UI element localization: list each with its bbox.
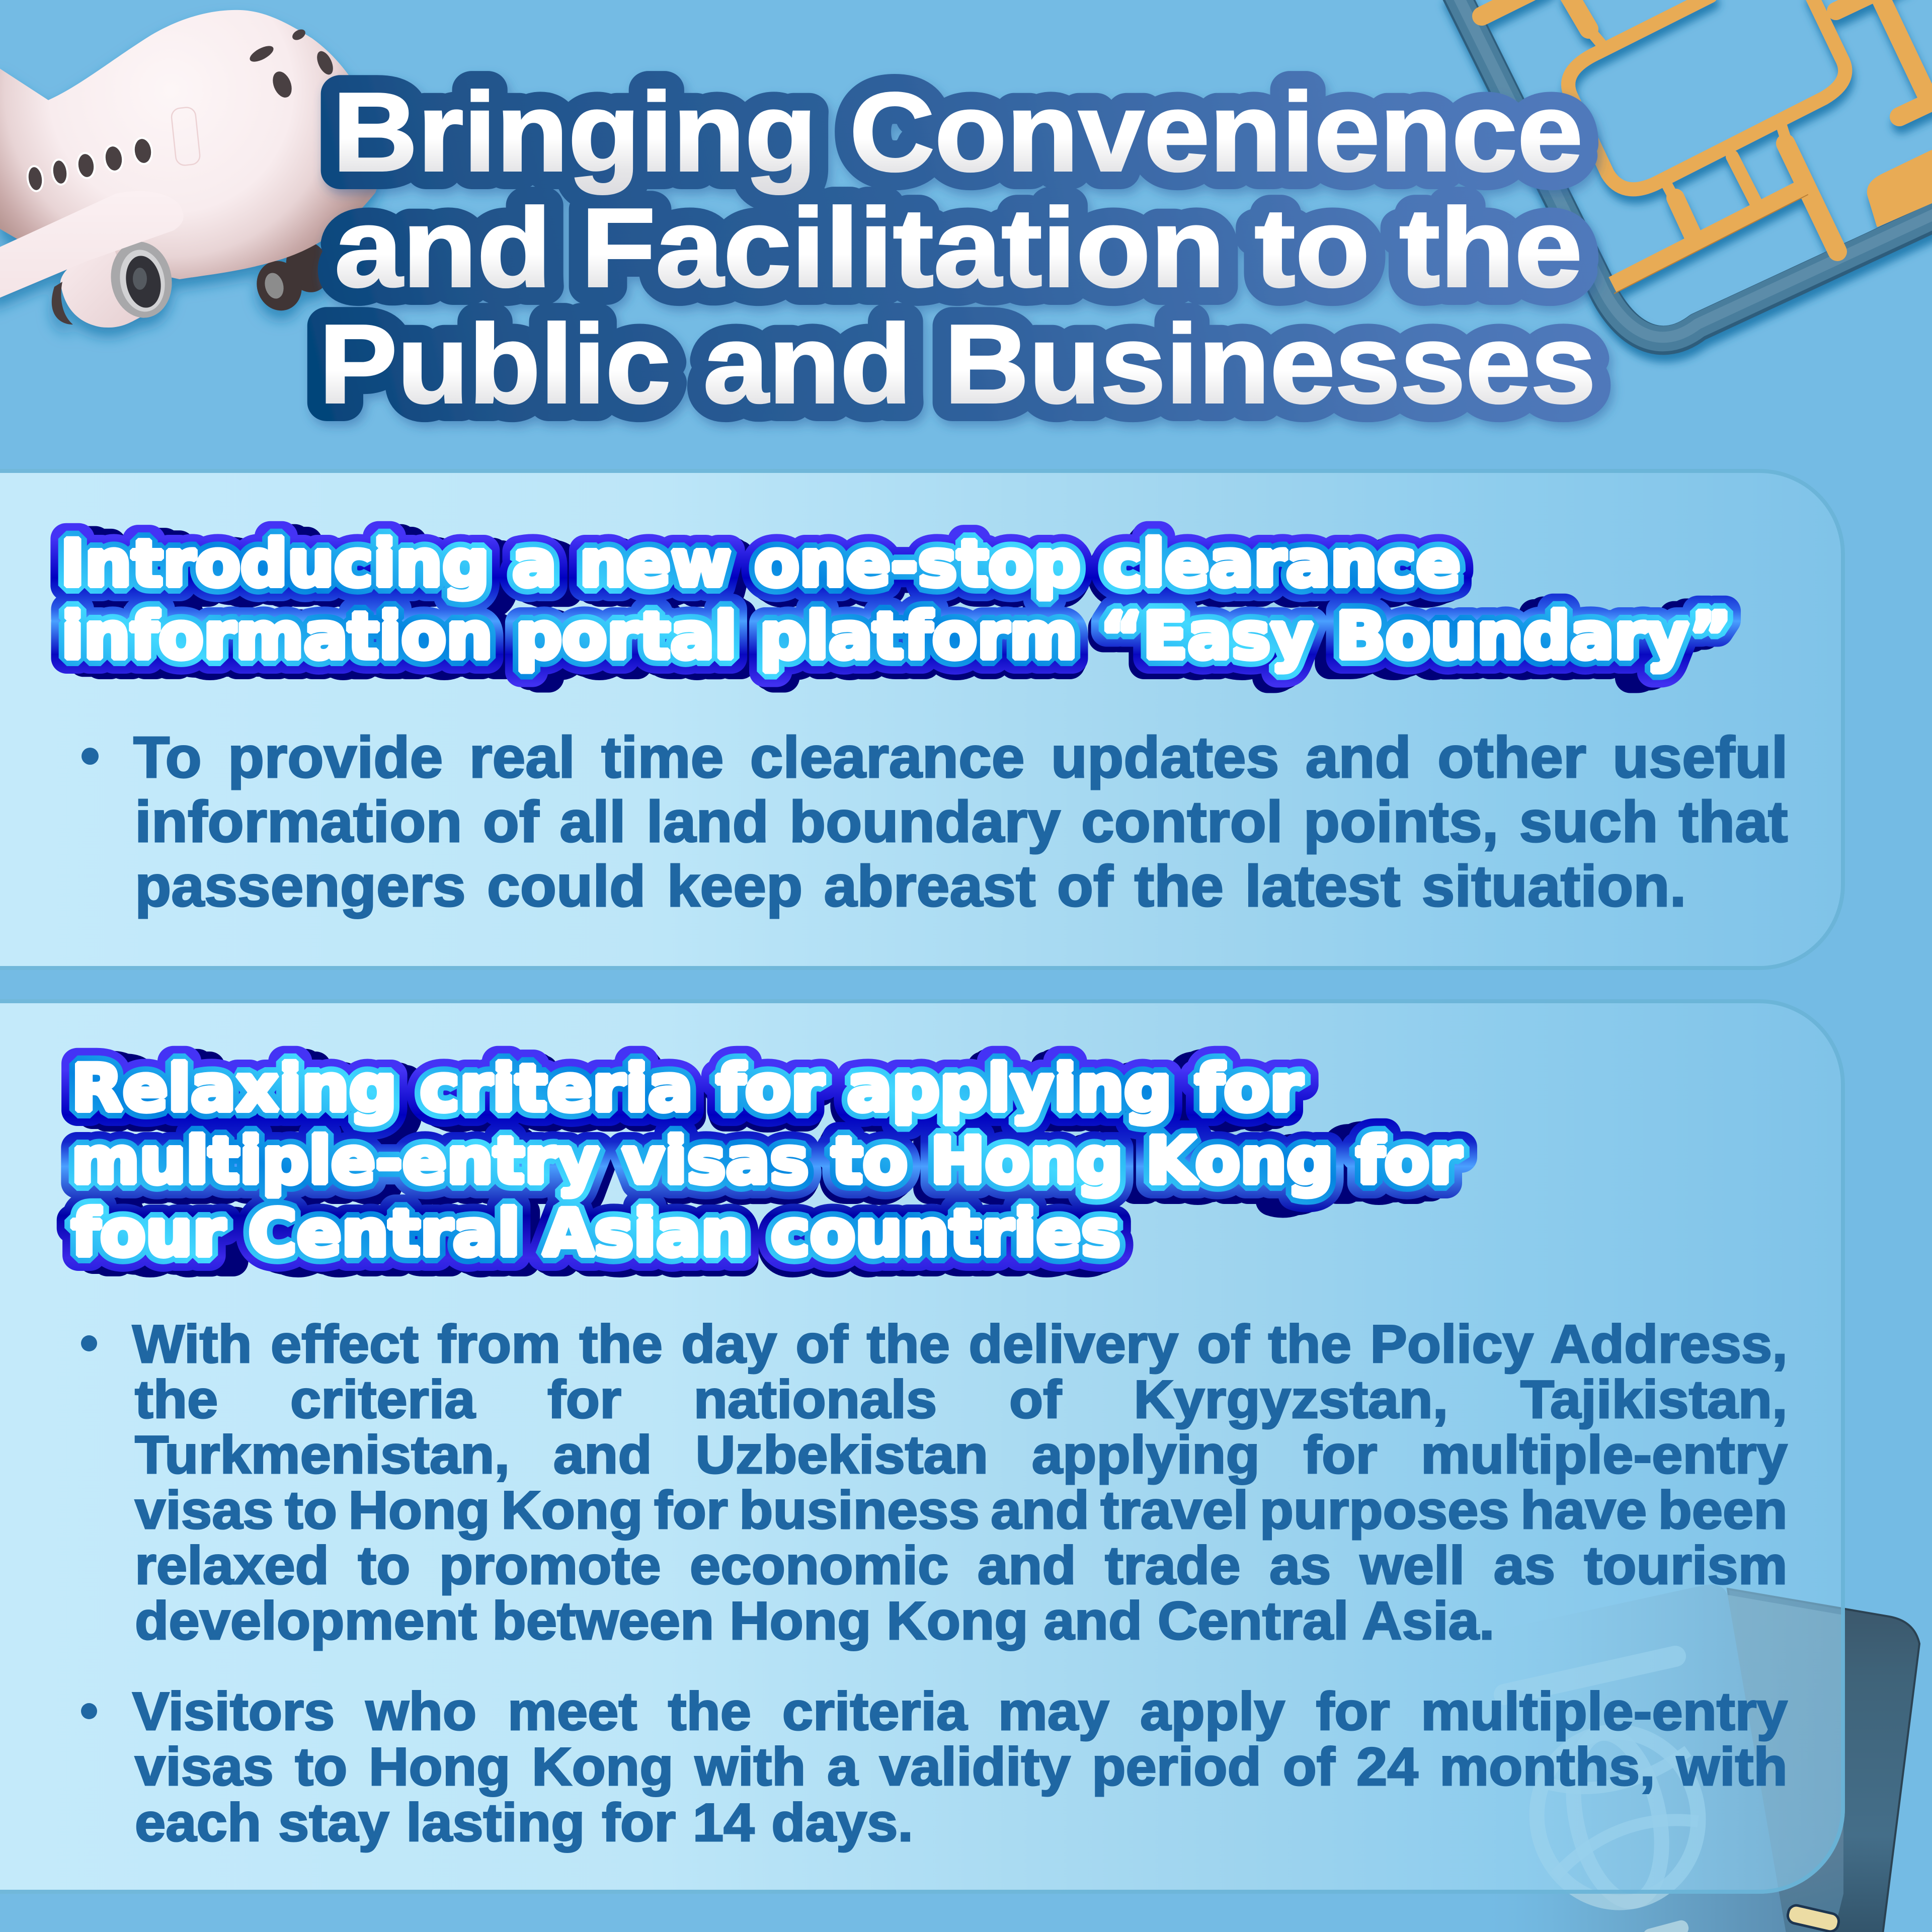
heading: multiple-entry visas: multiple-entry visas to Hong Kong for <box>87 1126 1446 1201</box>
heading: Easy Boundary: information portal platform “Easy Boundary” <box>78 601 1719 676</box>
text block: effect from Policy Address: relaxed to promote economic and trade as well as tourism <box>135 1535 1788 1595</box>
heading: Easy Boundary: Introducing a new one-stop clearance <box>60 526 1461 601</box>
title: Bringing Convenience <box>333 70 1583 195</box>
heading: multiple-entry visas: Relaxing criteria for applying for <box>71 1051 1303 1126</box>
landing gear <box>250 235 337 317</box>
heading: multiple-entry visas: Relaxing criteria for applying for <box>71 1051 1303 1126</box>
text block: effect from Policy Address: visas to Hong Kong for business and travel purposes have been <box>135 1480 1788 1540</box>
cockpit windows <box>248 27 336 100</box>
heading: Easy Boundary: Introducing a new one-stop clearance <box>94 531 1444 607</box>
heading: multiple-entry visas: four Central Asian countries <box>87 1198 1112 1273</box>
panel: relaxing visa criteria for Central Asian countries <box>0 999 1845 1894</box>
text block: visa validity period: visas to Hong Kong with a validity period of 24 months, with <box>135 1736 1788 1797</box>
title: Public and Businesses <box>319 302 1596 427</box>
heading: Easy Boundary <box>50 521 1741 693</box>
heading: Easy Boundary: Introducing a new one-stop clearance <box>77 529 1453 604</box>
text block: effect from Policy Address: Turkmenistan, and Uzbekistan applying for multiple-entry <box>135 1424 1788 1485</box>
heading: multiple-entry visas: four Central Asian countries <box>71 1196 1120 1271</box>
text block: real time clearance updates: To provide real time clearance updates and other useful <box>133 725 1788 790</box>
heading: multiple-entry visas: Relaxing criteria for applying for <box>87 1054 1291 1129</box>
heading: multiple-entry visas: multiple-entry visas to Hong Kong for <box>101 1129 1431 1204</box>
heading: multiple-entry visas: Relaxing criteria for applying for <box>71 1051 1303 1126</box>
wing <box>0 191 184 302</box>
heading: multiple-entry visas: multiple-entry visas to Hong Kong for <box>71 1123 1462 1198</box>
text block: effect from Policy Address <box>131 1314 1788 1651</box>
heading: multiple-entry visas: multiple-entry visas to Hong Kong for <box>71 1123 1462 1198</box>
icon: passport behind panel <box>1494 1585 1920 1932</box>
heading: Easy Boundary: information portal platform “Easy Boundary” <box>95 604 1707 679</box>
windows <box>26 137 153 192</box>
bullet marker <box>82 748 99 765</box>
heading: Easy Boundary: information portal platform “Easy Boundary” <box>61 599 1732 674</box>
text block: effect from Policy Address: development between Hong Kong and Central Asia. <box>135 1590 1495 1651</box>
heading: Easy Boundary: Introducing a new one-stop clearance <box>60 526 1461 601</box>
engine <box>52 237 178 328</box>
heading: multiple-entry visas <box>56 1045 1477 1277</box>
passport emblem <box>1504 1656 1714 1918</box>
title: Public and Businesses <box>319 302 1596 427</box>
bullet marker <box>81 1703 97 1719</box>
title: and Facilitation to the <box>335 186 1582 310</box>
heading: multiple-entry visas: multiple-entry visas to Hong Kong for <box>71 1123 1462 1198</box>
fuselage <box>0 10 382 279</box>
title: Bringing Convenience <box>333 70 1583 195</box>
bullet marker <box>81 1335 97 1351</box>
icon: plastic model sprue frame <box>1439 0 1932 368</box>
text block: visa validity period: Visitors who meet the criteria may apply for multiple-entry <box>132 1681 1788 1741</box>
title: and Facilitation to the <box>335 186 1582 310</box>
heading: multiple-entry visas: four Central Asian countries <box>71 1196 1120 1271</box>
text block: real time clearance updates <box>133 725 1788 919</box>
heading: Easy Boundary: Introducing a new one-stop clearance <box>60 526 1461 601</box>
icon: white cartoon airplane <box>0 10 386 345</box>
door <box>171 107 201 166</box>
text block: visa validity period: each stay lasting for 14 days. <box>135 1792 913 1853</box>
text block: effect from Policy Address: With effect from the day of the delivery of the Policy Address, <box>132 1314 1788 1374</box>
passport clasp <box>1642 1904 1840 1932</box>
heading: multiple-entry visas: four Central Asian countries <box>71 1196 1120 1271</box>
title <box>305 70 1618 432</box>
heading: multiple-entry visas: four Central Asian countries <box>101 1201 1105 1276</box>
panel: one-stop clearance information portal <box>0 469 1845 970</box>
text block: effect from Policy Address: the criteria for nationals of Kyrgyzstan, Tajikistan, <box>135 1369 1788 1429</box>
heading: Easy Boundary: information portal platform “Easy Boundary” <box>61 599 1732 674</box>
text block: real time clearance updates: information of all land boundary control points, such that <box>135 789 1788 854</box>
text block: visa validity period <box>135 1679 1790 1855</box>
text block: real time clearance updates: passengers could keep abreast of the latest situation. <box>135 853 1686 919</box>
heading: Easy Boundary: information portal platform “Easy Boundary” <box>61 599 1732 674</box>
heading: multiple-entry visas: Relaxing criteria for applying for <box>101 1056 1279 1132</box>
